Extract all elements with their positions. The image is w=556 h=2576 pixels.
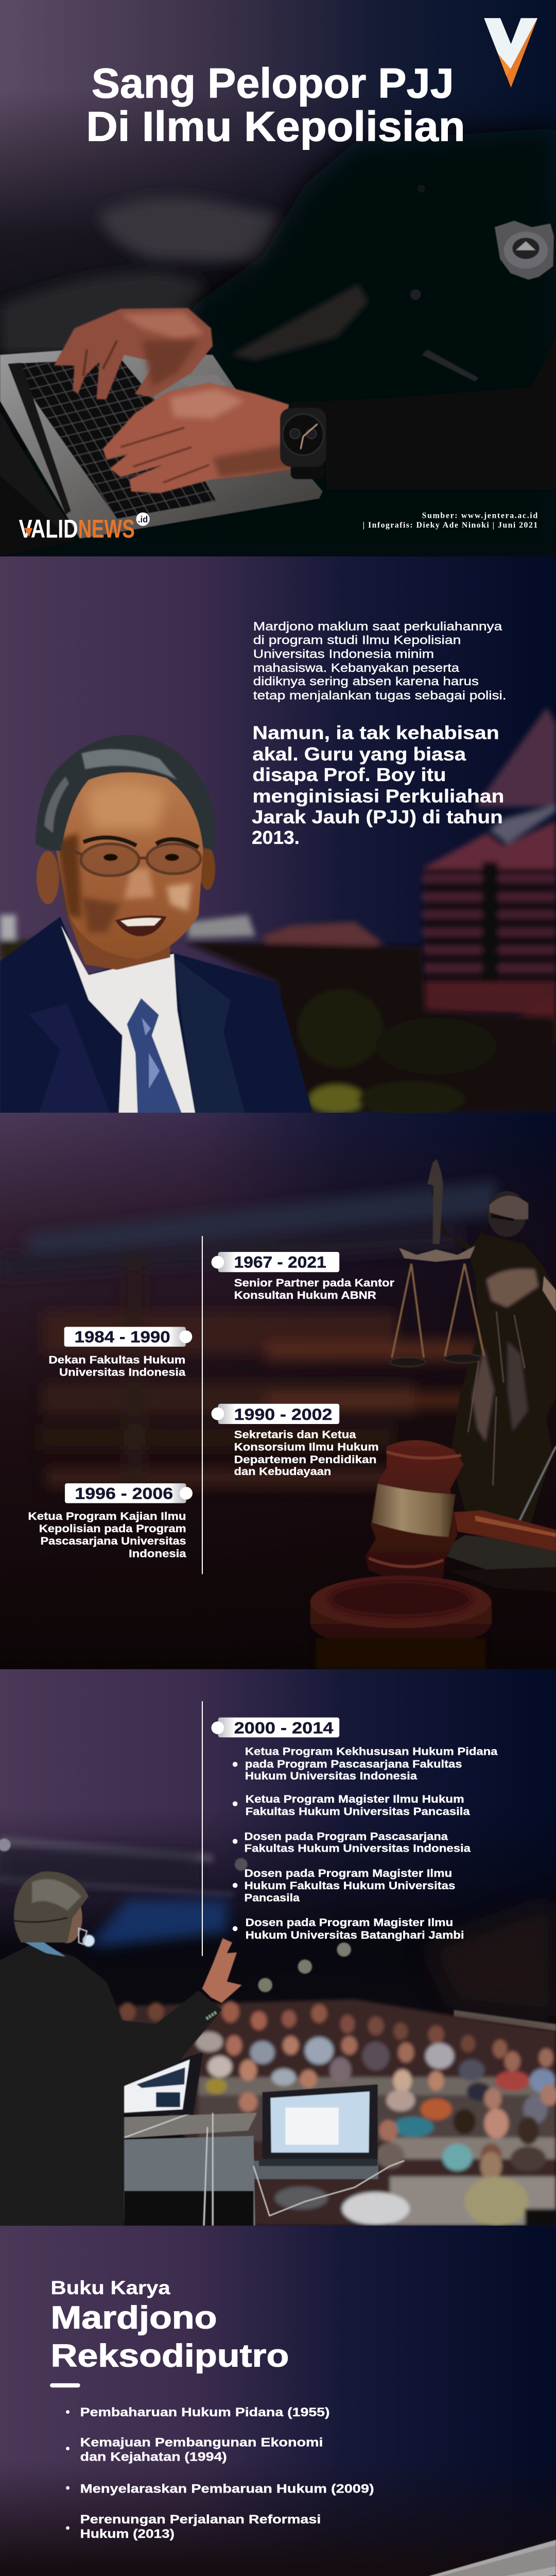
highlighted paragraph: akal. Guru yang biasa <box>252 744 466 765</box>
list item: Dosen Magister Batanghari: Hukum Universitas Batanghari Jambi <box>246 1929 464 1941</box>
body paragraph: Mardjono maklum saat perkuliahannya <box>253 619 502 633</box>
panel: career timeline <box>0 1113 556 1669</box>
panel: books <box>0 2226 556 2576</box>
list item: Dosen Magister Batanghari: Dosen pada Program Magister Ilmu <box>246 1917 453 1929</box>
timeline item: 1996 - 2006: Pascasarjana Universitas <box>41 1535 186 1547</box>
profile background <box>0 556 556 1113</box>
face <box>53 766 204 959</box>
heading: Buku Karya <box>50 2277 170 2298</box>
body paragraph: Universitas Indonesia minim <box>253 647 434 660</box>
photo: blurred bookshelf <box>0 1180 496 1487</box>
row 3 <box>208 2056 232 2077</box>
glasses <box>81 844 201 876</box>
ears <box>37 851 59 904</box>
heading underline <box>50 2383 80 2387</box>
list item: Ketua Magister Ilmu Hukum: Ketua Program Magister Ilmu Hukum <box>246 1793 464 1805</box>
title: Sang Pelopor PJJ <box>92 60 454 107</box>
list item: Dosen Pascasarjana UI <box>233 1830 471 1855</box>
timeline item: 1990 - 2002: dan Kebudayaan <box>234 1465 331 1478</box>
row 5 <box>392 2117 433 2137</box>
timeline item: 1984 - 1990: Dekan Fakultas Hukum <box>48 1353 185 1366</box>
photo: lower hand <box>103 382 294 493</box>
body paragraph <box>253 619 507 702</box>
highlighted paragraph: 2013. <box>252 827 300 848</box>
timeline item: 1990 - 2002 <box>212 1404 379 1478</box>
book list <box>66 2405 374 2541</box>
list item: Ketua Kekhususan Hukum Pidana: Ketua Program Kekhususan Hukum Pidana <box>245 1745 497 1758</box>
icon: V logo <box>484 18 537 88</box>
timeline item: 1967 - 2021: Konsultan Hukum ABNR <box>234 1289 376 1301</box>
body paragraph: mahasiswa. Kebanyakan peserta <box>253 661 459 674</box>
books background <box>0 2226 556 2576</box>
illustration: Prof. Mardjono portrait <box>0 735 313 1113</box>
title: Di Ilmu Kepolisian <box>86 103 465 150</box>
list item: Dosen Magister Pancasila: Dosen pada Program Magister Ilmu <box>245 1867 452 1879</box>
book list: Hukum (2013) <box>80 2527 175 2541</box>
photo: Lady Justice statue <box>390 1159 556 1592</box>
timeline item: 1996 - 2006: Indonesia <box>129 1547 186 1560</box>
front row <box>480 2152 502 2180</box>
list item: Ketua Magister Ilmu Hukum <box>233 1793 470 1818</box>
shirt collar <box>61 925 195 1113</box>
list item: Ketua Kekhususan Hukum Pidana <box>233 1745 497 1782</box>
timeline item: 1996 - 2006: Kepolisian pada Program <box>39 1522 186 1535</box>
necktie <box>127 998 182 1113</box>
photo: campus and trees <box>0 915 556 1117</box>
photo: officer shirt <box>0 128 556 556</box>
photo: podium <box>123 2113 404 2226</box>
hero background <box>0 0 556 556</box>
highlighted paragraph: menginisiasi Perkuliahan <box>252 786 504 806</box>
teaching background <box>0 1669 556 2226</box>
timeline item: 1984 - 1990 <box>48 1327 192 1378</box>
list item: Dosen Magister Pancasila: Pancasila <box>245 1891 300 1904</box>
row 2 <box>196 2032 223 2052</box>
photo: university tower <box>376 707 556 1043</box>
book list: dan Kejahatan (1994) <box>80 2450 227 2464</box>
row 4 <box>205 2078 227 2094</box>
panel: hero <box>0 0 556 556</box>
timeline item: 1996 - 2006: 1996 - 2006 <box>75 1484 173 1502</box>
scales of justice <box>390 1159 484 1366</box>
timeline item: 1990 - 2002: 1990 - 2002 <box>234 1405 332 1423</box>
highlighted paragraph <box>252 723 504 848</box>
photo: laptop <box>0 351 323 556</box>
list item: Dosen Magister Pancasila <box>233 1867 455 1904</box>
timeline item: 1967 - 2021: Senior Partner pada Kantor <box>234 1277 394 1289</box>
timeline item: 1996 - 2006 <box>28 1483 193 1560</box>
title <box>86 60 465 150</box>
timeline item: 1984 - 1990: 1984 - 1990 <box>75 1328 170 1346</box>
eyes <box>103 854 118 861</box>
photo: gavel <box>310 1440 556 1669</box>
panel: profile <box>0 556 556 1113</box>
suit <box>0 917 313 1113</box>
icon: wristwatch <box>280 401 326 479</box>
list item: Ketua Kekhususan Hukum Pidana: Hukum Universitas Indonesia <box>245 1770 417 1782</box>
book list: Pembaharuan Hukum Pidana (1955) <box>80 2405 330 2419</box>
list item: Dosen Pascasarjana UI: Dosen pada Program Pascasarjana <box>245 1830 448 1842</box>
list item: Dosen Magister Pancasila: Hukum Fakultas Hukum Universitas <box>245 1879 455 1892</box>
sound block <box>310 1599 491 1649</box>
book list: Kemajuan Pembangunan Ekonomi <box>80 2435 323 2449</box>
photo: right laptop <box>253 2084 378 2179</box>
body paragraph: didiknya sering absen karena harus <box>253 674 479 688</box>
heading <box>50 2277 289 2374</box>
eyebrows <box>83 838 199 848</box>
heading: Reksodiputro <box>50 2338 289 2374</box>
timeline item: 1990 - 2002: Sekretaris dan Ketua <box>234 1429 356 1441</box>
logo: ValidNews.id <box>19 513 150 543</box>
neck <box>67 915 170 970</box>
timeline axis <box>202 1701 203 1956</box>
timeline item: 1967 - 2021: 1967 - 2021 <box>234 1252 326 1271</box>
timeline item: 1990 - 2002: Konsorsium Ilmu Hukum <box>234 1441 379 1453</box>
book list: Perenungan Perjalanan Reformasi <box>80 2513 321 2527</box>
heading: Mardjono <box>50 2300 217 2336</box>
hair <box>36 735 215 851</box>
photo: open book <box>166 2540 556 2576</box>
year pill: 2000 - 2014: 2000 - 2014 <box>234 1719 334 1737</box>
source credit: | Infografis: Dieky Ade Ninoki | Juni 2021 <box>363 521 537 530</box>
list item: Dosen Magister Batanghari <box>233 1917 464 1941</box>
photo: blurred audience <box>117 1999 556 2226</box>
mouth <box>115 916 167 936</box>
list item: Ketua Kekhususan Hukum Pidana: pada Program Pascasarjana Fakultas <box>245 1758 462 1770</box>
source credit <box>363 512 537 530</box>
highlighted paragraph: Namun, ia tak kehabisan <box>252 723 499 743</box>
logo: ValidNews.id: .id <box>138 514 148 524</box>
book list: Menyelaraskan Pembaruan Hukum (2009) <box>80 2482 374 2496</box>
timeline item: 1996 - 2006: Ketua Program Kajian Ilmu <box>28 1510 186 1522</box>
list item: Ketua Magister Ilmu Hukum: Fakultas Hukum Universitas Pancasila <box>246 1805 470 1818</box>
timeline item: 1990 - 2002: Departemen Pendidikan <box>234 1453 376 1466</box>
timeline item: 1967 - 2021 <box>212 1252 394 1301</box>
body paragraph: di program studi Ilmu Kepolisian <box>253 633 461 647</box>
photo: couch <box>0 197 284 355</box>
icon: police badge <box>495 221 554 280</box>
panel: teaching career <box>0 1669 556 2226</box>
photo: auditorium ceiling lights <box>0 1836 556 2031</box>
body paragraph: tetap menjalankan tugas sebagai polisi. <box>253 689 507 702</box>
logo: ValidNews.id: NEWS <box>78 514 135 543</box>
photo: upper hand <box>54 308 213 399</box>
timeline axis <box>202 1236 203 1574</box>
photo: left laptop <box>120 2053 203 2114</box>
timeline background <box>0 1113 556 1669</box>
source credit: Sumber: www.jentera.ac.id <box>422 512 537 520</box>
list item: Dosen Pascasarjana UI: Fakultas Hukum Universitas Indonesia <box>245 1842 471 1855</box>
photo: speaker <box>0 1871 242 2226</box>
highlighted paragraph: disapa Prof. Boy itu <box>252 765 446 785</box>
logo: ValidNews.id: VALID <box>19 514 78 543</box>
year pill: 2000 - 2014 <box>212 1718 339 1737</box>
rear rows <box>120 2003 135 2021</box>
timeline item: 1984 - 1990: Universitas Indonesia <box>59 1366 185 1378</box>
highlighted paragraph: Jarak Jauh (PJJ) di tahun <box>252 807 503 827</box>
